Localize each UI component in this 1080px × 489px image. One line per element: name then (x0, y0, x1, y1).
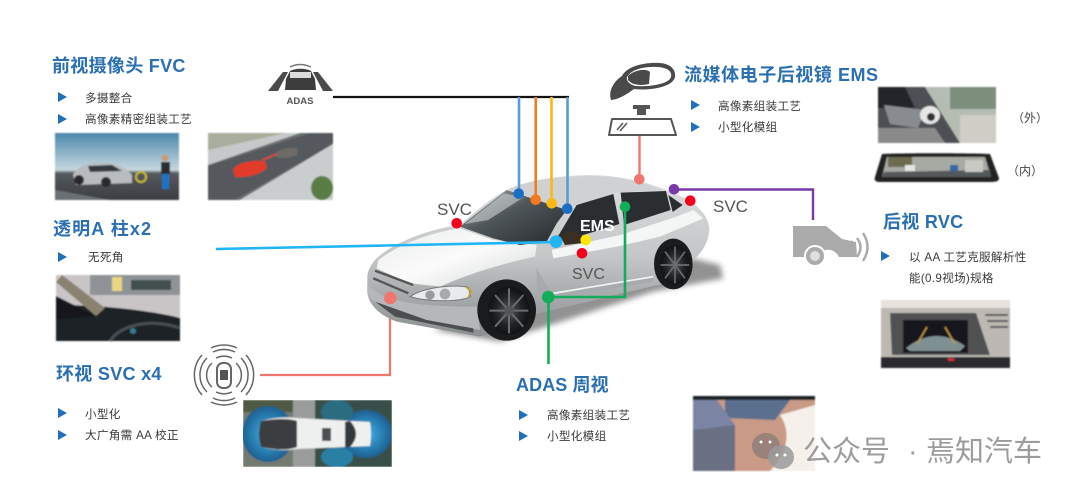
heading: SVC: 环视 SVC x4 (56, 364, 162, 384)
bullet list: EMS: 小型化模组 (718, 120, 778, 134)
rear wheel (654, 239, 693, 289)
panel: ADAS surround (516, 375, 815, 471)
bullet list: ADAS surround: 高像素组装工艺 (547, 408, 630, 422)
headlight (410, 286, 471, 301)
label: EMS: EMS (580, 218, 615, 235)
car shadow (433, 258, 723, 342)
connector: blue 2 (566, 97, 569, 208)
icon: surround sensing (194, 345, 254, 405)
caption: inside: （内） (1007, 164, 1043, 178)
bullet list: ADAS surround (519, 408, 630, 443)
car illustration (367, 175, 723, 342)
panel: streaming rearview mirror EMS (609, 63, 1048, 182)
windshield (460, 190, 567, 245)
connector: SVC salmon (260, 298, 390, 375)
photo: interior streaming mirror (875, 153, 999, 182)
bullet list: FVC: 高像素精密组装工艺 (85, 112, 192, 126)
grille (373, 271, 413, 293)
photo: A pillar cabin (56, 275, 180, 341)
icon: ADAS (268, 64, 333, 107)
roof (508, 176, 662, 209)
lower bumper (367, 283, 480, 330)
label: SVC side: SVC (572, 266, 605, 283)
text: account name: 公众号 (803, 436, 890, 468)
photo: surround camera view (693, 396, 815, 471)
bullet list: SVC (58, 407, 179, 442)
panel: front view camera FVC (52, 55, 333, 200)
connector: EMS salmon (638, 128, 641, 179)
bullet list: ADAS surround: 小型化模组 (547, 429, 607, 443)
bullet list: EMS (691, 99, 801, 134)
bullet text: RVC: 能(0.9视场)规格 (909, 271, 994, 285)
text: account name: 焉知汽车 (926, 435, 1042, 468)
caption: outside: （外） (1012, 111, 1048, 125)
bullet text: RVC (881, 250, 1027, 285)
car body (367, 175, 709, 337)
bullet text: RVC: 以 AA 工艺克服解析性 (909, 250, 1027, 264)
marker dots on car (384, 174, 696, 304)
connector: RVC purple (674, 190, 813, 220)
connector: orange (534, 97, 537, 200)
bullet list: EMS: 高像素组装工艺 (718, 99, 801, 113)
heading: EMS: 流媒体电子后视镜 EMS (684, 64, 879, 85)
icon: side mirror (610, 63, 675, 100)
panel: transparent A pillar (53, 219, 180, 341)
bullet list: SVC: 小型化 (85, 407, 121, 421)
connector: ADAS surround green (548, 207, 625, 364)
photo: reversing display (881, 300, 1010, 368)
heading: RVC: 后视 RVC (883, 212, 963, 232)
bullet list: FVC (58, 91, 192, 126)
photo: forward collision road (208, 133, 333, 200)
heading: ADAS surround: ADAS 周视 (516, 375, 609, 395)
icon: wechat (752, 433, 794, 469)
bullet: A pillar: 无死角 (88, 251, 124, 264)
icon: rear camera car (793, 226, 868, 266)
heading: A pillar: 透明A 柱x2 (53, 219, 152, 239)
label: SVC rear: SVC (713, 197, 748, 216)
icon: interior rearview mirror (609, 105, 676, 135)
connector: cyan A pillar (216, 242, 556, 249)
front wheel (477, 279, 536, 341)
photo: surround sonar (242, 400, 392, 467)
bullet list: SVC: 大广角需 AA 校正 (85, 428, 179, 442)
panel: surround view SVC (56, 345, 392, 467)
connector: ADAS bus black (333, 96, 569, 98)
panel: rear view RVC (793, 212, 1027, 368)
bullet list: FVC: 多摄整合 (85, 91, 133, 105)
icon: ADAS: ADAS (287, 96, 313, 107)
hood highlight (377, 228, 537, 287)
text: account name: · (900, 436, 926, 468)
connector: blue 1 (518, 97, 520, 194)
photo: pedestrian detection (55, 133, 179, 200)
heading: FVC: 前视摄像头 FVC (52, 55, 186, 76)
photo: exterior camera mirror (878, 87, 996, 143)
side windows (557, 191, 683, 237)
connector: yellow (550, 97, 553, 203)
label: SVC front: SVC (437, 200, 472, 219)
door highlight (552, 210, 703, 258)
watermark (752, 433, 1042, 469)
